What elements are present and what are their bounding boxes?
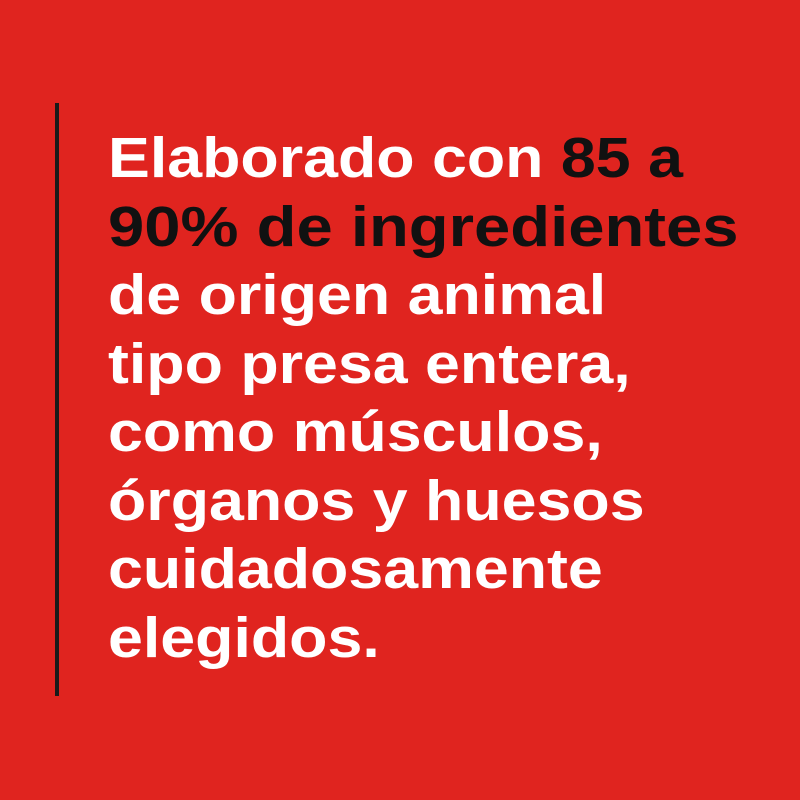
main text block: como músculos, — [108, 400, 603, 464]
main text block: cuidadosamente — [108, 537, 603, 601]
main text block — [108, 126, 739, 670]
main text block: elegidos. — [108, 606, 380, 670]
vertical accent line — [55, 103, 59, 696]
main text block: órganos y huesos — [108, 468, 645, 532]
main text block: 90% de ingredientes — [108, 194, 739, 258]
main text block: tipo presa entera, — [108, 332, 631, 396]
main text block: de origen animal — [108, 263, 606, 327]
main text block: Elaborado con 85 a — [108, 126, 683, 190]
